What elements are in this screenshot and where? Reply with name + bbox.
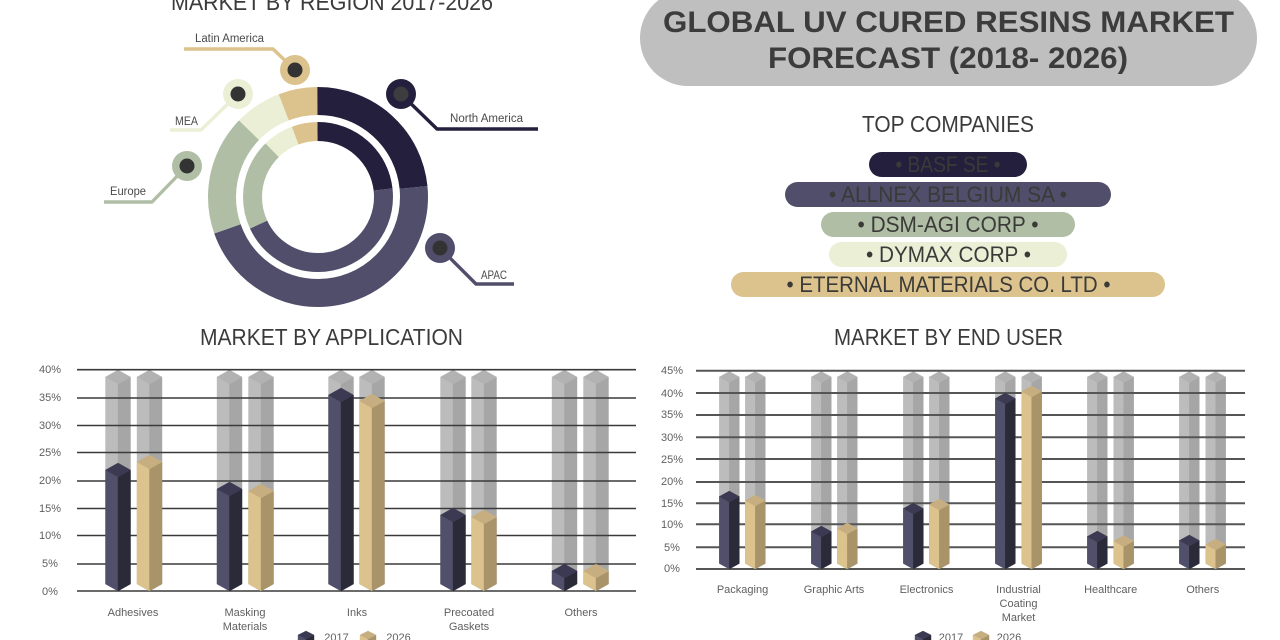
- company: Eternal Materials: • ETERNAL MATERIALS CO. LTD •: [786, 272, 1110, 297]
- callout: Europe: Europe: [110, 186, 146, 198]
- y axis labels: [39, 364, 61, 598]
- category labels: Others: [564, 607, 598, 619]
- bars: Precoated Gaskets: [440, 508, 496, 591]
- outer ring: 2026: [222, 101, 414, 293]
- category labels: Adhesives: [108, 607, 159, 619]
- bars: Healthcare: [1087, 531, 1134, 569]
- background columns: [106, 370, 608, 591]
- y axis labels: 5%: [664, 542, 680, 554]
- y axis labels: 20%: [661, 476, 683, 488]
- category labels: [108, 607, 598, 633]
- company list: [731, 152, 1165, 297]
- y axis labels: 25%: [661, 454, 683, 466]
- y axis labels: 35%: [39, 392, 61, 404]
- category labels: Electronics: [900, 584, 954, 596]
- category labels: Others: [1186, 584, 1220, 596]
- bars: Inks: [328, 388, 384, 591]
- y axis labels: 10%: [661, 519, 683, 531]
- y axis grid: [77, 370, 636, 591]
- category labels: Materials: [223, 621, 268, 633]
- title banner: [640, 0, 1257, 86]
- category labels: Market: [1002, 612, 1035, 624]
- callout: MEA: MEA: [175, 116, 198, 128]
- company: BASF SE: • BASF SE •: [896, 152, 1000, 177]
- bars: Electronics: [903, 499, 949, 569]
- heading: market by application: MARKET BY APPLICATION: [200, 324, 463, 350]
- bar chart: market by end user: [661, 365, 1245, 640]
- bars: Packaging: [719, 491, 765, 569]
- y axis labels: 30%: [39, 420, 61, 432]
- heading: top companies: TOP COMPANIES: [862, 111, 1034, 137]
- y axis labels: 10%: [39, 530, 61, 542]
- y axis labels: 20%: [39, 475, 61, 487]
- company: DSM-AGI Corp: • DSM-AGI CORP •: [858, 212, 1038, 237]
- category labels: Healthcare: [1084, 584, 1137, 596]
- title banner: GLOBAL UV CURED RESINS MARKET: [663, 6, 1234, 39]
- company: Allnex Belgium SA: • ALLNEX BELGIUM SA •: [829, 182, 1067, 207]
- bars: Adhesives: [106, 455, 162, 591]
- category labels: Industrial: [996, 584, 1041, 596]
- callout: APAC: [425, 233, 514, 284]
- category labels: Packaging: [717, 584, 768, 596]
- callout: North America: [386, 79, 538, 129]
- category labels: Precoated: [444, 607, 494, 619]
- bar chart: market by application: [39, 364, 636, 640]
- y axis labels: 30%: [661, 432, 683, 444]
- y axis labels: 5%: [42, 558, 58, 570]
- callout: APAC: APAC: [481, 270, 507, 282]
- y axis labels: 40%: [661, 388, 683, 400]
- legend: [915, 631, 1021, 640]
- category labels: Inks: [347, 607, 368, 619]
- bars: Masking Materials: [217, 482, 274, 591]
- bars: Others: [552, 564, 608, 591]
- y axis labels: 15%: [661, 498, 683, 510]
- y axis labels: 25%: [39, 447, 61, 459]
- y axis labels: 0%: [664, 563, 680, 575]
- bars: Industrial Coating Market: [995, 386, 1042, 569]
- category labels: Masking: [225, 607, 265, 619]
- category labels: Coating: [1000, 598, 1037, 610]
- y axis labels: 45%: [661, 365, 683, 377]
- heading: market by end user: MARKET BY END USER: [834, 324, 1063, 350]
- company: Dymax Corp: • DYMAX CORP •: [866, 242, 1031, 267]
- category labels: [717, 584, 1220, 624]
- title banner: FORECAST (2018- 2026): [768, 42, 1128, 75]
- category labels: Gaskets: [449, 621, 490, 633]
- callout: Latin America: [184, 33, 310, 85]
- callout: MEA: [170, 79, 253, 130]
- y axis labels: [661, 365, 683, 575]
- callout: Latin America: Latin America: [195, 33, 265, 45]
- callout: Europe: [104, 151, 202, 202]
- inner ring: 2017: [252, 132, 384, 262]
- callout: North America: North America: [450, 113, 524, 125]
- legend: [298, 631, 411, 640]
- background columns: [719, 372, 1226, 569]
- y axis labels: 35%: [661, 409, 683, 421]
- y axis labels: 40%: [39, 364, 61, 376]
- y axis labels: 15%: [39, 503, 61, 515]
- bars: Graphic Arts: [811, 523, 857, 569]
- y axis grid: [696, 371, 1245, 569]
- y axis labels: 0%: [42, 586, 58, 598]
- donut chart: market by region: [222, 101, 414, 293]
- bars: Others: [1179, 535, 1226, 569]
- category labels: Graphic Arts: [804, 584, 865, 596]
